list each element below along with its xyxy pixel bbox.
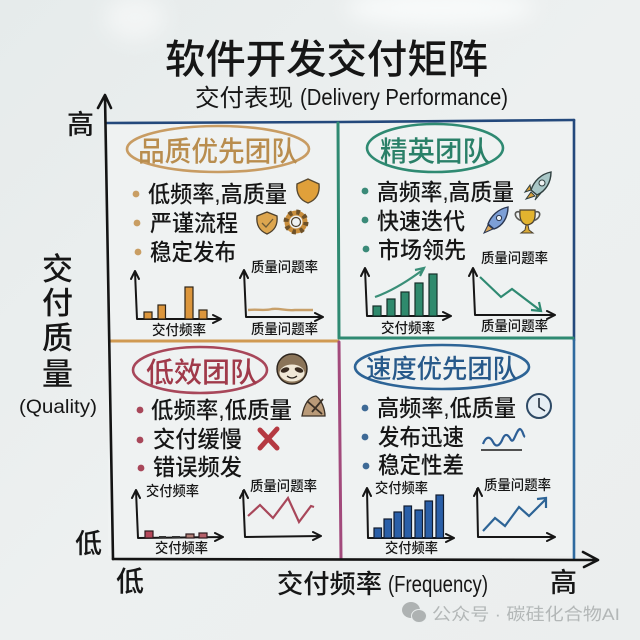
chart: quality issue rate falling line [469,250,555,334]
chart: quality issue rate rising line [474,477,555,541]
icon: trophy [515,210,540,233]
pill heading: 品质优先团队 [138,136,298,167]
axis label: low frequency: 低 [116,566,144,597]
pill heading: 低效团队 [146,357,258,388]
icon: red cross [260,429,277,448]
title: 软件开发交付矩阵 [165,38,488,82]
chart: delivery frequency low bars: 交付频率 [146,483,199,499]
horizontal axis arrow [113,552,598,567]
bullet list: 快速迭代 [377,208,465,234]
bullet list [133,181,287,265]
x axis heading top [195,84,508,112]
axis label: frequency: (Frequency) [388,571,488,597]
icon: blue rocket [484,207,508,233]
bullet list: 错误频发 [153,454,242,480]
panel: elite team [361,124,555,336]
pill heading: 速度优先团队 [366,354,518,384]
chart: delivery frequency rising bars [361,268,451,336]
chart: quality issue rate flat line: 质量问题率 [251,259,318,275]
chart: quality issue rate rising line: 质量问题率 [484,477,551,493]
pill heading [355,345,529,389]
chart: delivery frequency rising bars: 交付频率 [381,320,435,336]
pill heading [367,124,503,172]
chart: quality issue rate zigzag: 质量问题率 [250,478,317,494]
bullet list: 高频率,低质量 [377,395,516,421]
icon: wechat [402,602,426,622]
chart: quality issue rate flat line: 质量问题率 [251,321,318,337]
icon: clock [527,394,551,418]
icon: check shield [257,212,277,234]
axis label: quality: 质 [42,321,73,356]
bullet list: 稳定发布 [150,239,236,265]
pill heading: 精英团队 [380,136,490,167]
bullet list [362,395,516,478]
quadrant grid lines [107,120,574,558]
chart: delivery frequency low bars [132,483,223,556]
chart: delivery frequency low bars: 交付频率 [155,540,208,556]
bullet list [362,179,514,263]
axis label: low quality: 低 [75,529,102,559]
icon: broken item [302,396,325,416]
icon: rocket [525,172,551,200]
chart: delivery frequency blue bars: 交付频率 [375,480,428,496]
bullet list [137,397,292,480]
axis label: quality: (Quality) [19,397,97,418]
watermark: 公众号 · 碳硅化合物AI [432,605,620,624]
pill heading [127,126,309,172]
x axis heading top: (Delivery Performance) [300,84,508,110]
axis label: quality [19,252,97,418]
icon: sloth [277,354,307,384]
x axis heading top: 交付表现 [195,85,293,112]
bullet list: 发布迅速 [378,424,464,450]
chart: quality issue rate falling line: 质量问题率 [481,318,548,334]
bullet list: 市场领先 [378,237,466,263]
bullet list: 高频率,高质量 [377,179,514,205]
chart: quality issue rate flat line [240,259,323,337]
axis label: quality: 量 [42,357,73,392]
chart: quality issue rate falling line: 质量问题率 [481,250,548,266]
bullet list: 交付缓慢 [153,426,242,452]
bullet list: 稳定性差 [378,452,464,478]
axis label: high frequency: 高 [550,568,577,598]
axis label: quality: 付 [42,286,73,321]
chart: delivery frequency bars: 交付频率 [152,322,206,338]
axis label: high quality: 高 [67,110,94,140]
axis label: quality: 交 [42,252,73,287]
axis label: frequency [277,569,488,599]
bullet list: 严谨流程 [150,210,238,236]
watermark [402,602,620,624]
panel: speed-first team [355,345,555,556]
panel: quality-first team [127,126,323,338]
chart: delivery frequency blue bars [363,480,454,556]
pill heading [133,347,267,393]
vertical axis arrow [98,95,113,559]
chart: delivery frequency bars [131,271,221,338]
panel: inefficient team [132,347,325,556]
chart: delivery frequency blue bars: 交付频率 [385,540,438,556]
chart: quality issue rate zigzag [240,478,321,540]
bullet list: 低频率,高质量 [148,181,287,207]
icon: wave with underline [481,429,525,450]
icon: gear [286,212,306,232]
icon: shield [297,179,319,203]
bullet list: 低频率,低质量 [151,397,292,423]
axis label: frequency: 交付频率 [277,569,382,599]
